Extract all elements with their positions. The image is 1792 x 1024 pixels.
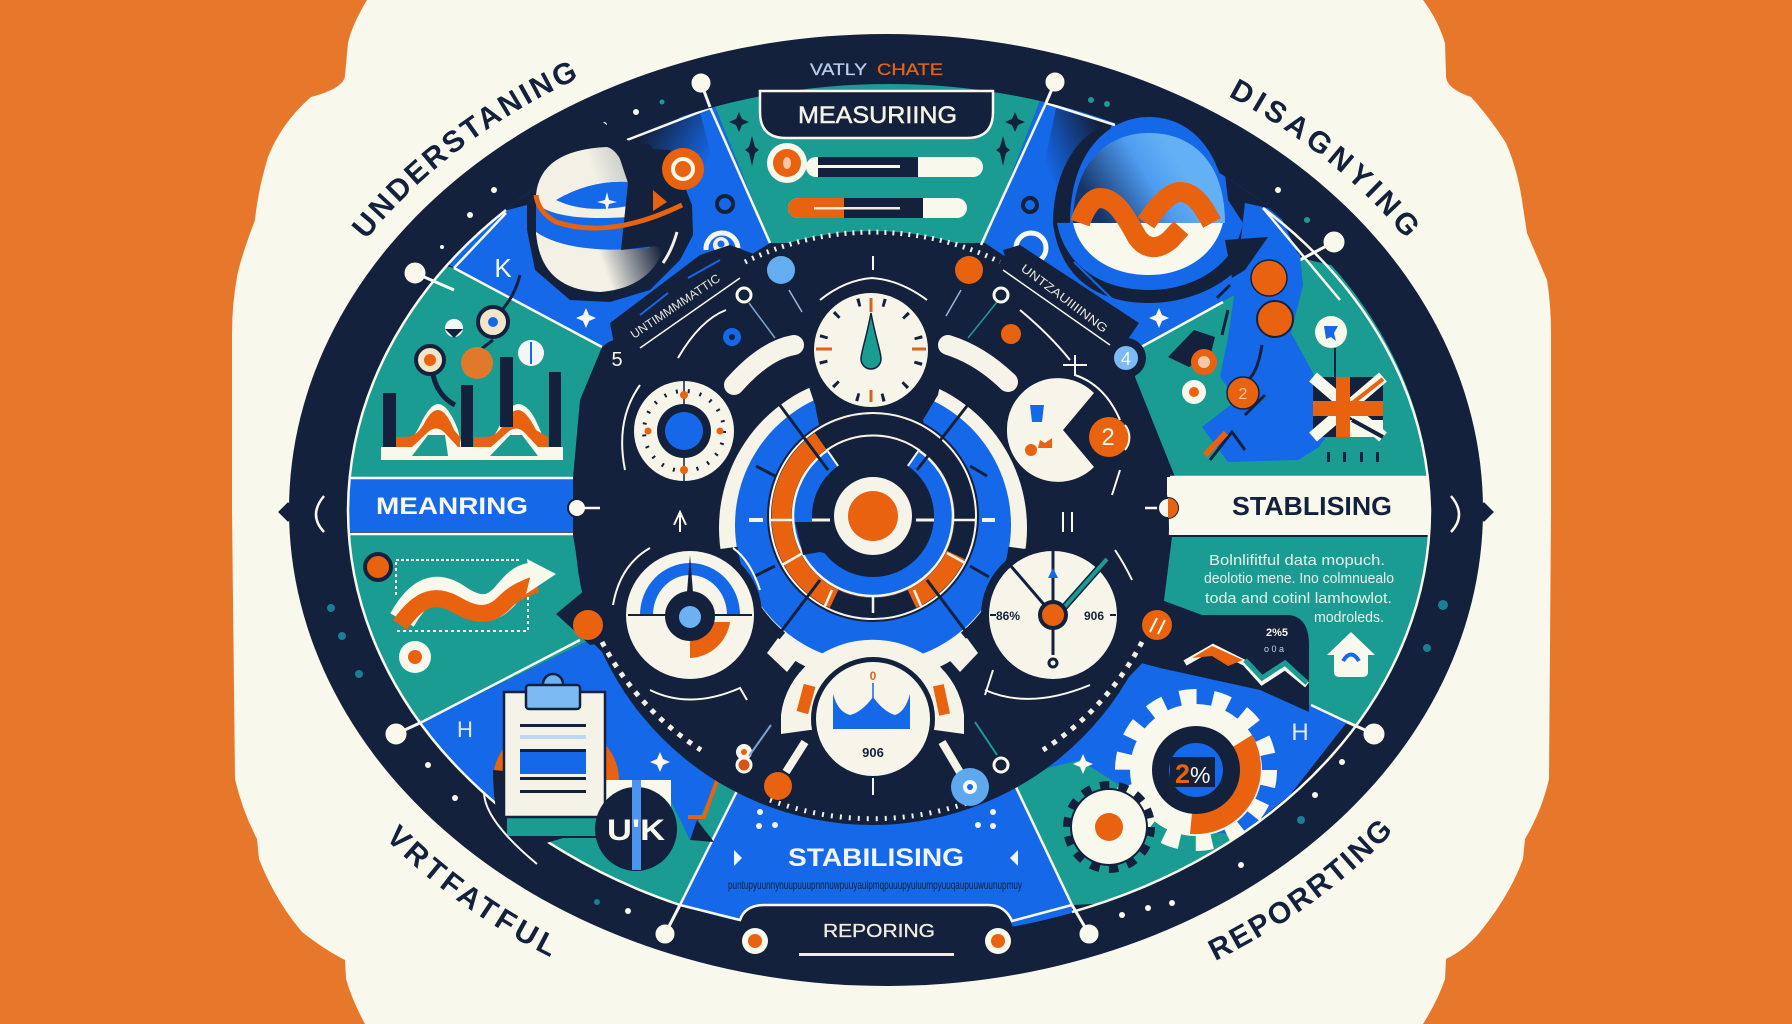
gauge: lower left	[613, 543, 762, 700]
segment: top measuring	[714, 84, 1040, 243]
paragraph: deolotio mene. Ino colmnuealo	[1204, 570, 1394, 587]
side bracket left	[316, 496, 324, 532]
stars on teal segment	[729, 112, 1025, 166]
ring dividers	[771, 520, 975, 613]
right tab text	[1003, 261, 1115, 345]
navy cut top-right	[1114, 123, 1282, 223]
segment: clipboard blue	[422, 642, 715, 840]
gauge: bottom: 0	[870, 669, 877, 683]
bottom squiggle text: puntupyuunnynuupuuupnnnuwpuuyauipmqpuuupyuiuumpyuuqaupuuwuunupmuy	[728, 878, 1022, 892]
paragraph	[1204, 552, 1394, 626]
heading pill: measuring	[760, 91, 993, 138]
map: uk	[1168, 203, 1347, 462]
marker 5	[599, 340, 635, 376]
gauge: lower right: 906	[1084, 609, 1104, 623]
gauge: left	[634, 381, 734, 481]
bar chart with waves	[381, 275, 563, 460]
spoke end knobs	[387, 74, 1383, 942]
label: bottom stabilising: STABILISING	[788, 844, 964, 872]
triangle markers	[734, 809, 1018, 866]
icon: drum: K	[494, 253, 512, 283]
icon: large gear	[1073, 699, 1309, 841]
gauge: right pie	[1007, 378, 1129, 482]
cream tabs	[734, 345, 1008, 385]
thin arcs	[622, 310, 1120, 532]
segment: text right	[1164, 537, 1428, 724]
disc tick arcs	[602, 232, 1142, 819]
gauge: lower right	[981, 543, 1132, 699]
segment: understanding	[449, 106, 770, 347]
gauge: top	[809, 256, 933, 412]
title: vatly chate	[810, 60, 943, 79]
segment: disagnosing	[985, 101, 1298, 346]
gauge: right pie: 2	[1101, 424, 1115, 451]
arrow chart	[365, 554, 556, 673]
chart tab: 2%5	[1266, 627, 1288, 639]
icon: large gear: 2	[1175, 759, 1190, 789]
ring specks	[327, 97, 1448, 918]
segment: bottom stabilising	[682, 788, 1072, 927]
centre target rings	[719, 360, 1027, 682]
pins on disc	[568, 256, 1178, 640]
marker 5: 5	[611, 349, 623, 371]
cream lower-right block	[943, 638, 978, 672]
blue fade left	[629, 113, 710, 190]
cream panel	[232, 0, 1551, 1024]
paragraph: Bolnlifitful data mopuch.	[1209, 552, 1385, 569]
badge: uk: U'K	[607, 814, 665, 847]
segment: gears teal	[1017, 760, 1230, 905]
band: stabilising	[1167, 477, 1437, 535]
icon: large gear: H	[1291, 719, 1309, 746]
blue fade right	[1040, 108, 1112, 185]
navy wedge top	[800, 360, 945, 450]
heading pill: reporting	[680, 905, 1072, 960]
slider bars	[767, 143, 983, 218]
left tab text: UNTIMMMMATTIC	[628, 271, 723, 341]
badge: uk	[595, 780, 677, 871]
chart tab: o 0 a	[1264, 644, 1284, 654]
label: meaning band: MEANRING	[376, 493, 528, 520]
gauge: lower right: 86%	[996, 609, 1020, 623]
inner wheel outline	[348, 208, 1430, 912]
paragraph: modroleds.	[1314, 609, 1384, 626]
central dial disc	[556, 231, 1210, 825]
paragraph: toda and cotinl lamhowlot.	[1205, 590, 1392, 607]
navy cut top-left	[506, 118, 680, 210]
right tab text: UNTZAUIIIINNG	[1018, 261, 1110, 336]
label: stabilising band: STABLISING	[1232, 491, 1392, 521]
label: diagnosing: DISAGNYING	[1230, 78, 1418, 236]
icon: house	[1327, 632, 1375, 677]
segment: clipboard teal	[550, 782, 736, 904]
title: vatly chate: VATLY	[810, 60, 867, 79]
title: vatly chate: CHATE	[877, 60, 943, 79]
map: uk: 2	[1239, 386, 1248, 403]
icon: large gear: %	[1190, 762, 1210, 788]
segment: gears blue	[1040, 655, 1347, 835]
segment: map right	[1135, 258, 1440, 477]
cream lower-left block	[767, 638, 800, 672]
white connector line	[484, 792, 537, 864]
icon: clipboard: H	[457, 717, 473, 742]
label: reporting: REPORRTING	[1208, 821, 1390, 960]
chart tab	[1120, 599, 1309, 712]
marker 4	[1106, 338, 1146, 378]
label: understanding: UNDERSTANING	[351, 62, 576, 236]
left tab text	[628, 260, 740, 348]
icon: small gear	[1068, 786, 1150, 868]
band: meaning	[340, 478, 573, 532]
side bracket right	[1451, 496, 1459, 532]
spokes	[340, 103, 1440, 905]
icon: lens with wave	[1016, 117, 1270, 328]
navy gaps in cream ring	[728, 548, 1018, 640]
gauge: bottom	[736, 640, 1008, 806]
icon: clipboard	[457, 674, 719, 850]
segment: arrow left	[350, 535, 586, 722]
heading pill: reporting: REPORING	[823, 921, 935, 941]
icon: uk flag	[1313, 377, 1383, 462]
outer navy ring	[278, 34, 1494, 986]
icon: drum	[494, 120, 738, 328]
inner segment wheel	[340, 70, 1440, 950]
label: virtual: VRTFATFUL	[390, 824, 552, 957]
heading pill: measuring: MEASURIING	[798, 102, 957, 129]
segment: chart left	[351, 266, 602, 478]
gauge: bottom: 906	[862, 745, 884, 760]
marker 4: 4	[1121, 349, 1131, 369]
